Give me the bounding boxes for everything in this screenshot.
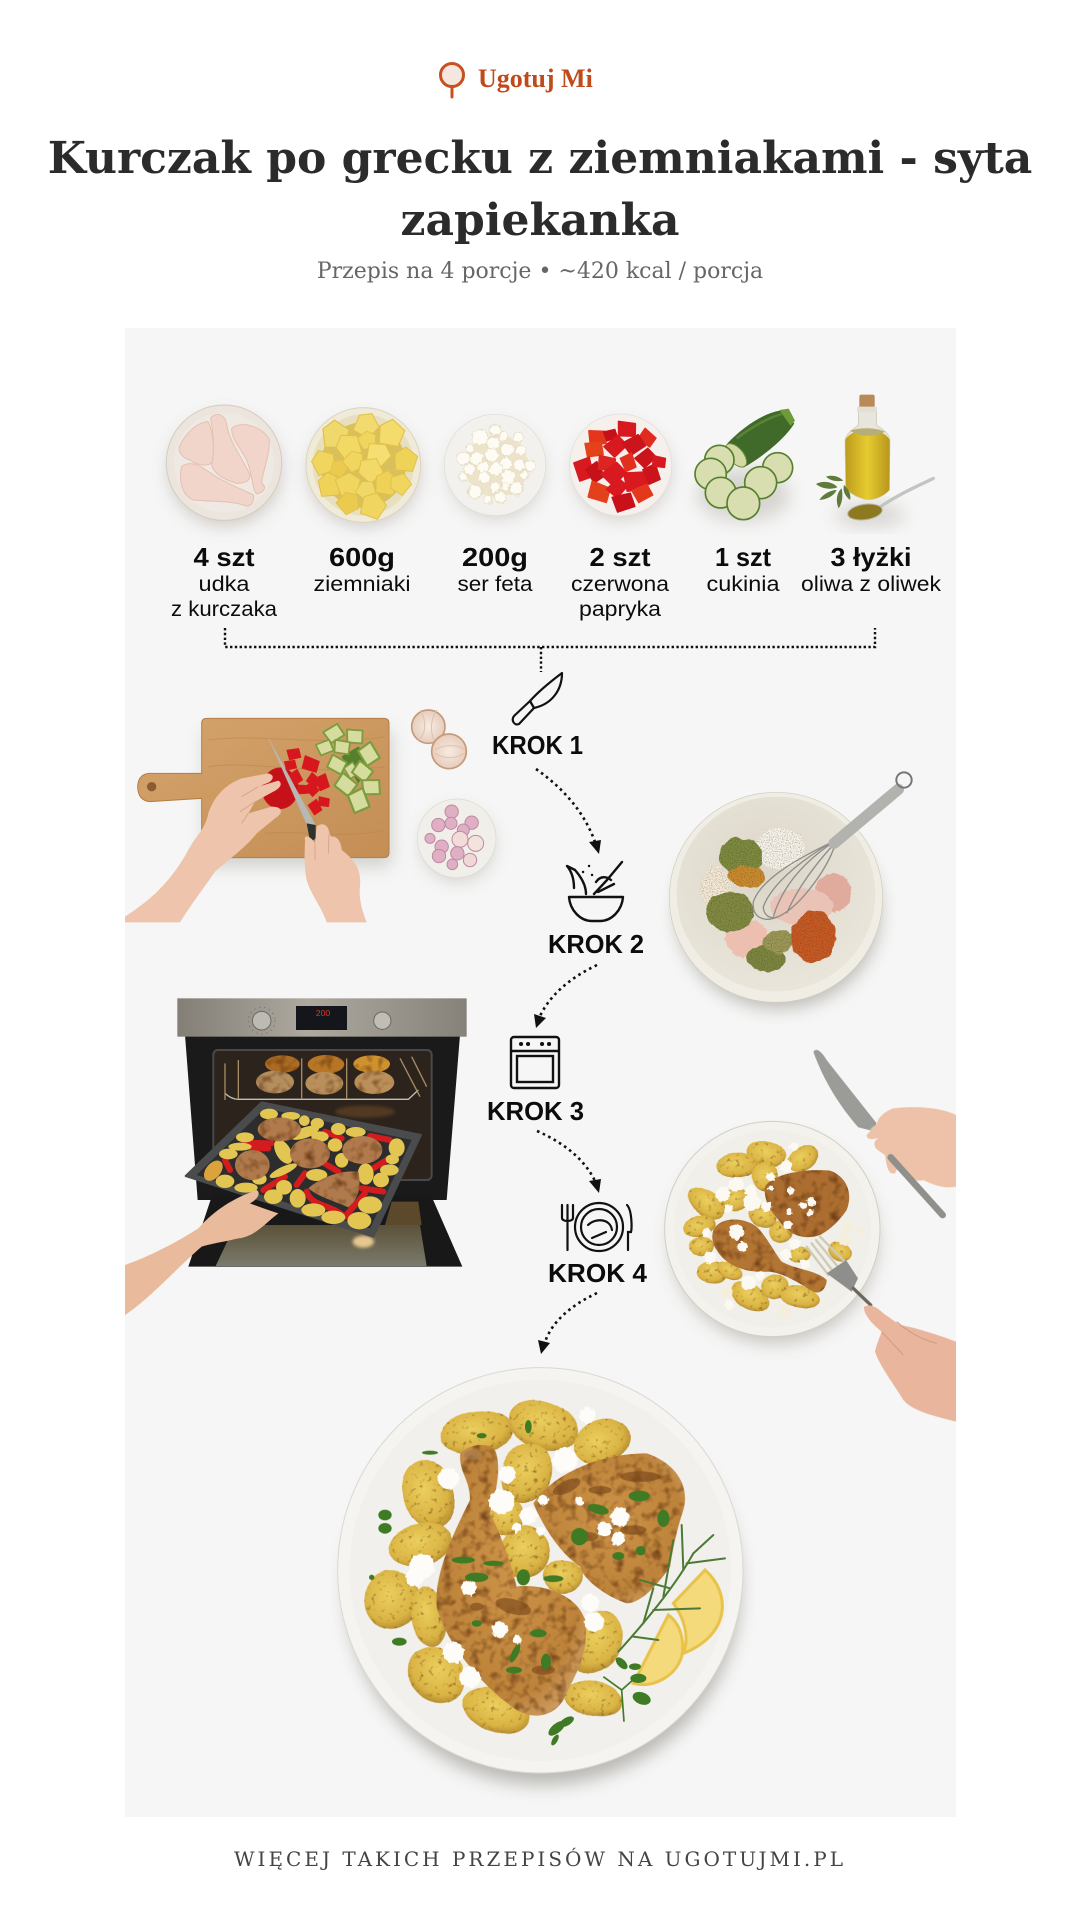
- feta crumbs: [702, 1142, 864, 1318]
- label: chicken legs: z kurczaka: [171, 598, 277, 621]
- step 4 scene: plate being eaten: [665, 1050, 956, 1422]
- chicken thigh: [533, 1453, 685, 1603]
- left hand: [125, 773, 281, 922]
- potatoes bowl: [306, 408, 421, 526]
- onion halves: [412, 710, 466, 769]
- step 4 label: KROK 4: [548, 1258, 648, 1288]
- step 3 icon: oven: [511, 1037, 559, 1088]
- step 2 icon: bowl with whisk: [567, 862, 623, 921]
- step 1 label: KROK 1: [492, 730, 583, 760]
- label: red pepper: 2 szt: [590, 542, 651, 572]
- step 2 label: KROK 2: [548, 929, 644, 959]
- oven control panel: 200: [316, 1008, 330, 1018]
- label: feta: ser feta: [458, 573, 533, 596]
- label: olive oil: 3 łyżki: [830, 542, 912, 572]
- title: zapiekanka: [401, 195, 679, 246]
- chicken pieces in bowl: [725, 873, 852, 958]
- label: red pepper: papryka: [579, 598, 661, 621]
- red pepper plate: [570, 414, 672, 519]
- brand logo: Ugotuj Mi: [478, 64, 593, 93]
- label: red pepper: [571, 542, 669, 621]
- plate: [665, 1121, 880, 1343]
- knife: [267, 734, 316, 843]
- label: potatoes: [314, 548, 409, 591]
- brand logo: [439, 62, 593, 98]
- upper hand: [867, 1107, 956, 1187]
- zucchini pieces: [315, 723, 382, 814]
- oven control panel: [177, 998, 467, 1037]
- footer call to action: WIĘCEJ TAKICH PRZEPISÓW NA UGOTUJMI.PL: [234, 1847, 846, 1871]
- title: Kurczak po grecku z ziemniakami - syta: [48, 133, 1032, 184]
- step 3 scene: oven: [125, 998, 467, 1315]
- table knife: [813, 1050, 883, 1140]
- olive oil bottle with spoon and olive leaves: [816, 395, 933, 527]
- right hand: [305, 824, 367, 922]
- arrow: step 2 to 3: [534, 965, 597, 1028]
- label: feta: [458, 548, 532, 591]
- label: red pepper: czerwona: [571, 573, 669, 596]
- chicken legs plate: [166, 405, 282, 526]
- ingredients row right: pepper, zucchini, oil: [570, 395, 933, 527]
- chicken drumstick: [436, 1445, 586, 1716]
- label: zucchini: 1 szt: [715, 542, 771, 572]
- label: olive oil: [802, 547, 941, 591]
- arrow: step 3 to 4: [537, 1131, 601, 1193]
- label: zucchini: [708, 548, 780, 591]
- red pepper being cut: [262, 749, 331, 816]
- label: olive oil: oliwa z oliwek: [801, 573, 942, 596]
- cutting board: [138, 718, 392, 867]
- knife handle: [891, 1157, 943, 1215]
- final dish: [338, 1368, 743, 1785]
- label: feta: 200g: [462, 542, 528, 572]
- arrow: step 4 to final dish: [538, 1293, 597, 1354]
- rolls on rack: [256, 1055, 394, 1095]
- ingredients row left: chicken, potatoes, feta: [166, 405, 546, 526]
- zucchini: [695, 409, 795, 522]
- step 1 icon: chef knife: [513, 673, 562, 724]
- label: potatoes: ziemniaki: [314, 573, 410, 596]
- oregano sprig: [603, 1655, 652, 1722]
- step 2 scene: mixing bowl: [669, 772, 912, 1008]
- subtitle: Przepis na 4 porcje • ~420 kcal / porcja: [317, 259, 763, 284]
- label: chicken legs: [172, 548, 277, 616]
- feta crumbs: [406, 1407, 629, 1688]
- potatoes: [363, 1391, 638, 1743]
- title: [48, 133, 1032, 246]
- label: chicken legs: 4 szt: [194, 542, 255, 572]
- step 1 scene: cutting board, hands, onions, shallots: [125, 710, 496, 922]
- bowl: [669, 792, 883, 1008]
- hand holding tray: [125, 1190, 278, 1315]
- infographic drawing: [125, 328, 956, 1817]
- arrow: step 1 to 2: [536, 769, 601, 854]
- feta plate: [444, 414, 546, 518]
- oven door: [188, 1197, 462, 1267]
- plate: [338, 1368, 743, 1785]
- label: chicken legs: udka: [198, 573, 250, 596]
- potatoes: [682, 1135, 856, 1318]
- fork: [807, 1237, 871, 1305]
- recipe panel: [125, 328, 956, 1817]
- spices: [700, 828, 836, 972]
- lower hand: [864, 1305, 956, 1422]
- step 4 icon: plate with cutlery: [562, 1203, 632, 1251]
- chicken pieces: [712, 1170, 849, 1293]
- browning and seasoning: [464, 1450, 660, 1675]
- baking tray with food: [186, 1102, 421, 1237]
- ingredient amounts and names: [171, 542, 942, 621]
- shallot bowl: [417, 799, 496, 881]
- label: zucchini: cukinia: [706, 573, 780, 596]
- oven body: [185, 1035, 460, 1200]
- parsley herbs: [369, 1420, 669, 1747]
- step 3 label: KROK 3: [487, 1096, 584, 1126]
- dotted bracket joining ingredients to step 1: [225, 628, 875, 672]
- lemon slices: [633, 1570, 722, 1684]
- label: potatoes: 600g: [329, 542, 395, 572]
- whisk: [753, 772, 912, 919]
- rosemary sprig: [618, 1525, 725, 1652]
